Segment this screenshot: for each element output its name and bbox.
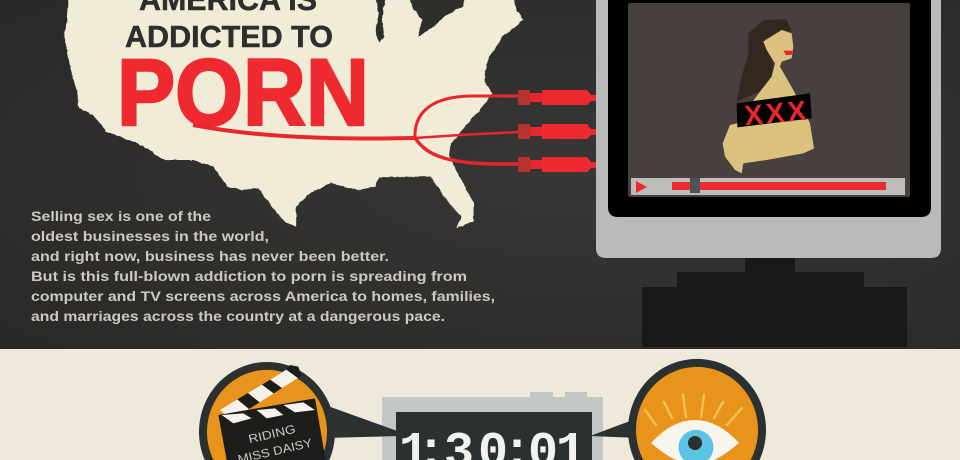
video player controls (631, 178, 905, 195)
badge ring (628, 359, 766, 460)
title (117, 0, 369, 146)
icon: eye badge (590, 359, 766, 460)
clock screen (396, 412, 592, 460)
clapper label: RIDING (247, 422, 297, 446)
hair (737, 19, 792, 102)
Great Lakes: Superior and Huron (408, 0, 463, 37)
lips (783, 51, 793, 55)
clock frame (382, 392, 603, 460)
intro text block: computer and TV screens across America to homes, families, (31, 288, 495, 304)
badge fill (207, 370, 327, 460)
intro text block: and right now, business has never been better. (31, 248, 389, 264)
plugs: three red connectors (518, 90, 596, 172)
intro text block: and marriages across the country at a dangerous pace. (31, 308, 445, 324)
pupil (688, 436, 702, 450)
video figure (723, 19, 814, 173)
intro text block: Selling sex is one of the (31, 208, 211, 224)
panel: dark header background (0, 0, 960, 349)
icon: clapperboard badge (199, 362, 400, 460)
iris (679, 430, 714, 460)
monitor (596, 0, 941, 258)
speech pointer (590, 418, 638, 438)
intro text block: But is this full-blown addiction to porn is spreading from (31, 268, 467, 284)
censor label: XXX (743, 95, 808, 131)
censor bar (737, 93, 812, 127)
eye white (651, 420, 739, 460)
intro text block (31, 208, 495, 324)
title line: Addicted to: ADDICTED TO (125, 19, 333, 54)
clapper stripes (222, 402, 315, 423)
clapper board (218, 398, 326, 460)
digital clock (382, 392, 603, 460)
speech pointer (325, 405, 400, 438)
badge fill (636, 367, 758, 460)
title line: Porn: PORN (117, 40, 369, 146)
body (723, 30, 814, 173)
panel: light section background (0, 349, 960, 460)
clapper stick (220, 365, 302, 420)
eye rays (645, 395, 742, 425)
clapper label (236, 422, 314, 460)
monitor stand (642, 258, 907, 347)
clapper parts (218, 365, 326, 460)
intro text block: oldest businesses in the world, (31, 228, 269, 244)
monitor bezel (596, 0, 941, 258)
badge ring (199, 362, 335, 460)
video screen (628, 3, 910, 197)
monitor inner frame (608, 0, 931, 217)
map: United States silhouette (64, 0, 523, 228)
cable: red cords from title to monitor (193, 96, 520, 164)
Great Lakes: Michigan (375, 0, 386, 42)
